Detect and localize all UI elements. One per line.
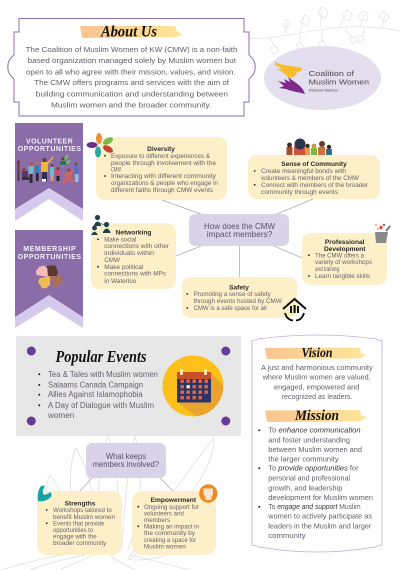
icon: purple hand <box>278 77 305 94</box>
strengths box <box>37 491 122 555</box>
connector: safety to center <box>238 246 240 277</box>
mission list: between Muslim women and <box>268 445 362 454</box>
diversity bullets <box>104 153 218 194</box>
panel: strengths <box>37 486 122 555</box>
empowerment bullets: volunteers and <box>144 510 184 518</box>
about text: building communication and understanding between <box>36 90 228 99</box>
about frame <box>8 18 255 116</box>
about text: based organization managed solely by Muslim women but <box>28 56 237 65</box>
vision text: A just and harmonious community <box>261 363 373 372</box>
panel: professional development <box>302 224 390 285</box>
ornate frame <box>252 335 382 552</box>
about text <box>26 45 237 109</box>
networking bullets: connections with other <box>104 243 170 250</box>
empowerment bullets: Making an impact in <box>144 524 199 530</box>
heading: diversity: Diversity <box>147 146 175 153</box>
about text: open to all who agree with their mission, values, and vision. <box>26 67 236 76</box>
icon: community group <box>286 138 332 155</box>
center node: how does the cmw impact members <box>189 214 289 246</box>
icon: flexed arm <box>38 486 52 501</box>
mission list: To engage and support Muslim <box>268 502 361 511</box>
professional development bullets: variety of workshops <box>315 259 373 266</box>
panel: diversity <box>86 133 227 200</box>
sense of community bullets: Create meaningful bonds with <box>261 168 346 175</box>
logo wordmark: Kitchener Waterloo <box>309 89 338 93</box>
heading: sense of community: Sense of Community <box>281 161 347 168</box>
logo wordmark: Coalition of <box>309 69 355 78</box>
mission list <box>258 426 373 540</box>
diversity bullets: Interacting with different community <box>111 173 217 180</box>
mission list: development for Muslim women <box>268 493 373 502</box>
diversity bullets: people through involvement with the <box>111 160 216 167</box>
logo ellipse <box>264 46 381 110</box>
safety bullets: through events hosted by CMW <box>194 298 282 305</box>
connector: professional development to center <box>273 246 302 258</box>
networking bullets: Make social <box>104 236 137 244</box>
panel: safety <box>182 277 306 320</box>
panel: professional development: Development <box>324 246 366 253</box>
about text: The Coalition of Muslim Women of KW (CMW) is a non-faith <box>26 45 237 54</box>
professional development bullets <box>308 252 373 280</box>
networking bullets: Make political <box>104 264 144 271</box>
empowerment bullets: Muslim women <box>144 544 186 550</box>
empowerment bullets <box>137 504 199 550</box>
connector: what keeps to strengths <box>80 478 92 491</box>
icon: network of people <box>91 215 110 235</box>
center node: how does the cmw impact members: impact members? <box>207 229 273 239</box>
center node: how does the cmw impact members: How does the CMW <box>204 221 276 231</box>
professional development bullets: The CMW offers a <box>315 252 364 260</box>
mission list: the larger community <box>268 454 339 463</box>
panel: popular events <box>16 336 241 436</box>
node: what keeps members involved: members involved? <box>93 460 160 469</box>
events background <box>16 336 241 436</box>
brush stroke: vision <box>265 348 366 359</box>
mission list: To provide opportunities for <box>268 464 359 473</box>
mission list: growth, and leadership <box>268 483 342 492</box>
connector: what keeps to empowerment <box>160 478 173 491</box>
strengths bullets <box>46 507 115 547</box>
vision text <box>261 363 373 401</box>
mission list: community <box>268 531 306 540</box>
heading: about us: About Us <box>100 24 157 40</box>
professional development bullets: and training <box>315 266 339 273</box>
empowerment bullets: Ongoing support for <box>144 504 199 511</box>
professional development box <box>302 233 387 285</box>
ribbon body <box>15 123 83 221</box>
ribbon body <box>15 230 83 328</box>
events list: women <box>47 411 74 420</box>
panel: vision and mission <box>252 335 382 552</box>
strengths bullets: engage with the <box>53 534 97 540</box>
decorative flower sketch behind lower boxes <box>0 436 216 570</box>
icon: four joined hands <box>36 265 62 288</box>
networking bullets: in Waterloo <box>104 278 137 285</box>
heading: safety: Safety <box>229 285 249 292</box>
sense of community bullets: volunteers & members of the CMW <box>261 175 360 182</box>
icon: yellow hand <box>275 62 302 78</box>
empowerment bullets: creating a space for <box>144 537 197 544</box>
ribbon: membership opportunities <box>15 230 83 328</box>
events list <box>38 370 158 420</box>
networking bullets <box>97 236 170 285</box>
brush stroke behind heading <box>80 26 183 38</box>
networking bullets: CMW <box>104 257 121 264</box>
strengths bullets: benefit Muslim women <box>53 514 115 521</box>
professional development bullets: Learn tangible skills <box>315 273 371 280</box>
icon: safe house <box>283 299 306 320</box>
empowerment box <box>132 491 216 555</box>
heading: networking: Networking <box>116 230 151 237</box>
connector: networking to center <box>176 246 201 256</box>
diversity box <box>96 137 227 200</box>
ribbon: volunteer opportunities: OPPORTUNITIES <box>18 146 81 153</box>
panel: about us <box>8 18 255 116</box>
node: what keeps members involved: What keeps <box>106 452 146 461</box>
decorative branch top right <box>220 7 400 55</box>
panel: sense of community <box>248 138 380 199</box>
connector: sense of community to center <box>276 199 313 214</box>
vision text: recognized as leaders. <box>282 392 352 401</box>
logo: coalition of muslim women <box>264 46 381 110</box>
panel: networking <box>91 215 176 289</box>
mission list: personal and professional <box>268 474 350 483</box>
about text: The CMW offers programs and services with the aim of <box>34 78 230 87</box>
diversity bullets: organizations & people who engage in <box>111 180 218 187</box>
icon: group of volunteers <box>17 155 78 183</box>
vision text: where Muslim women are valued, <box>262 373 371 382</box>
ribbon label: VOLUNTEER <box>26 139 73 146</box>
networking bullets: connections with MPs <box>104 270 167 278</box>
strengths bullets: Workshops tailored to <box>53 507 112 514</box>
sense of community bullets: community through events <box>261 189 339 196</box>
heading: strengths: Strengths <box>65 501 96 508</box>
ribbon label: MEMBERSHIP <box>23 246 76 253</box>
mission list: leaders in the Muslim and larger <box>268 521 372 530</box>
events list: Tea & Tales with Muslim women <box>48 370 158 379</box>
sense of community bullets <box>254 168 369 196</box>
heading: popular events: Popular Events <box>55 347 147 366</box>
heading: vision: Vision <box>302 346 333 361</box>
sense of community bullets: Connect with members of the broader <box>261 182 369 189</box>
brush stroke: mission <box>265 410 367 422</box>
networking bullets: individuals within <box>104 250 154 257</box>
diversity bullets: CMW <box>111 167 121 174</box>
safety bullets: CMW is a safe space for all <box>194 305 267 312</box>
heading: professional development: Professional <box>325 239 365 246</box>
diversity bullets: Exposure to different experiences & <box>111 153 210 160</box>
diversity bullets: different faiths through CMW events <box>111 187 214 194</box>
mission list: women to actively participate as <box>267 512 372 521</box>
about text: Muslim women and the broader community. <box>51 100 211 109</box>
ribbon: volunteer opportunities <box>15 123 83 221</box>
events list: Allies Against Islamophobia <box>48 390 143 399</box>
icon: colorful hands <box>86 133 114 158</box>
empowerment bullets: members <box>144 517 171 524</box>
icon: calendar <box>162 356 224 416</box>
safety bullets <box>186 291 282 312</box>
connector: diversity to center <box>162 200 202 214</box>
safety bullets: Promoting a sense of safety <box>194 291 271 298</box>
safety box <box>182 277 297 318</box>
logo wordmark: Muslim Women <box>309 78 369 87</box>
icon: raised fist <box>199 484 218 503</box>
events list: Salaams Canada Campaign <box>48 380 143 390</box>
heading: mission: Mission <box>294 408 339 424</box>
vision text: engaged, empowered and <box>274 382 359 391</box>
strengths bullets: broader community <box>53 540 107 547</box>
networking box <box>91 223 176 289</box>
icon: skills pot <box>375 224 390 243</box>
strengths bullets: opportunities to <box>53 527 93 534</box>
strengths bullets: Events that provide <box>53 520 104 528</box>
empowerment bullets: the community by <box>144 530 196 537</box>
ribbon: membership opportunities: OPPORTUNITIES <box>18 254 81 261</box>
mission list: To enhance communication <box>268 426 361 435</box>
sense of community box <box>248 155 380 199</box>
events list: A Day of Dialogue with Muslim <box>48 401 154 410</box>
mission list: and foster understanding <box>268 435 350 444</box>
node: what keeps members involved <box>86 443 166 478</box>
purple corner dots <box>27 346 230 426</box>
heading: empowerment: Empowerment <box>151 497 197 504</box>
panel: empowerment <box>132 484 218 555</box>
logo wordmark <box>309 69 369 93</box>
